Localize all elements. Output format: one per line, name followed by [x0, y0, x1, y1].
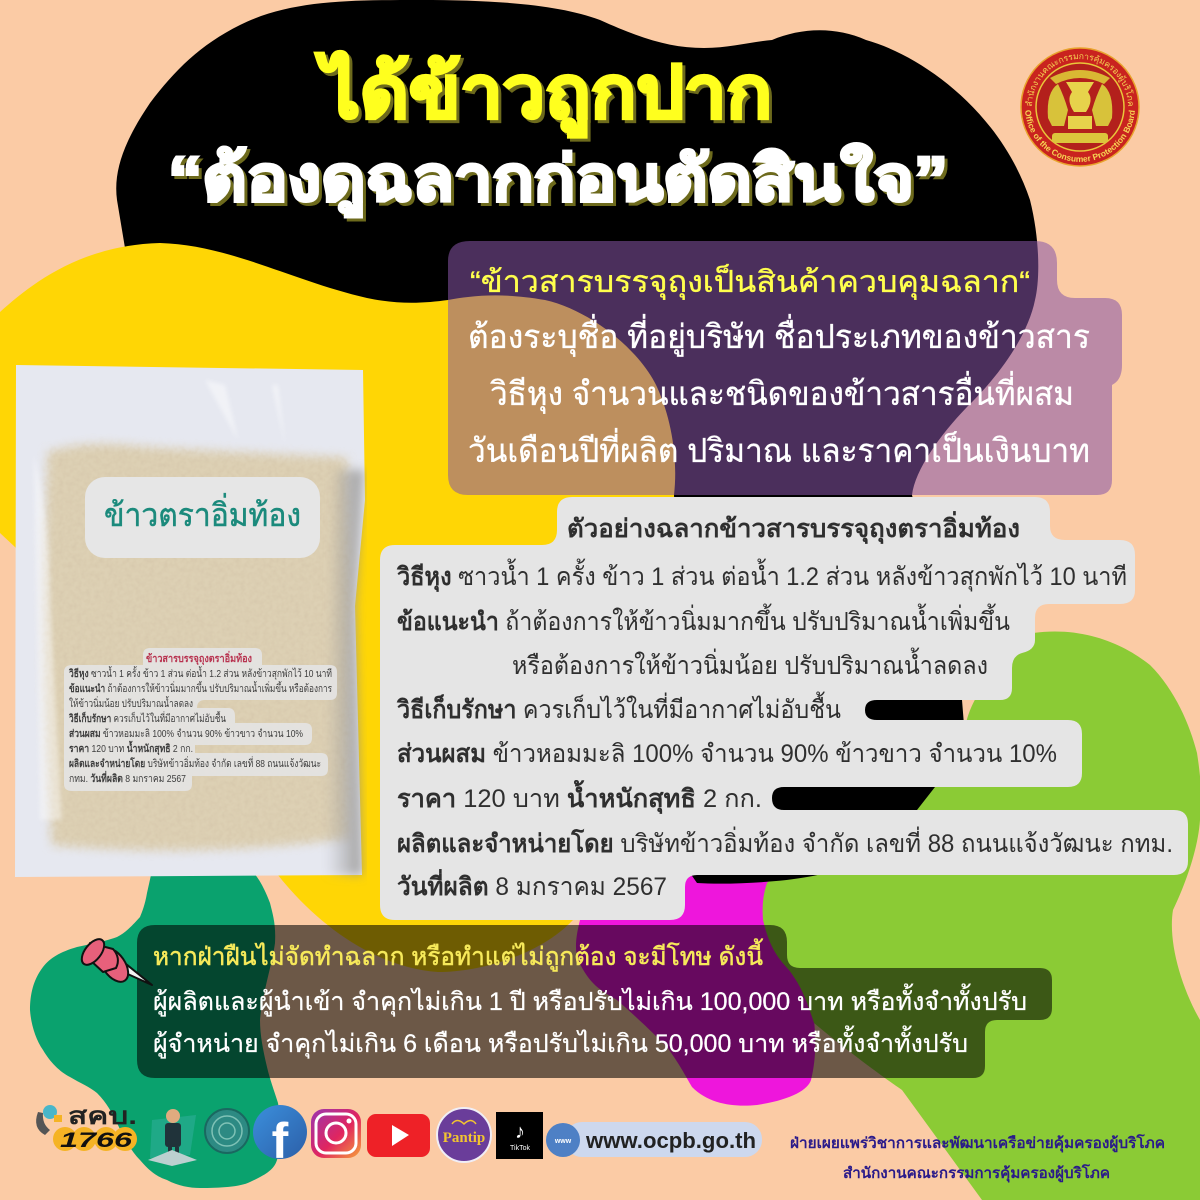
panel heading: “ข้าวสารบรรจุถุงเป็นสินค้าควบคุมฉลาก“	[470, 263, 1030, 301]
icon: TikTok: ♪	[515, 1121, 525, 1143]
mini label on bag: วิธีเก็บรักษา ควรเก็บไว้ในที่มีอากาศไม่อับชื้น	[68, 711, 226, 725]
background blob: black	[116, 0, 1038, 884]
footer icons	[36, 1103, 762, 1169]
mini label on bag	[64, 648, 337, 791]
mini label on bag: ส่วนผสม ข้าวหอมมะลิ 100% จำนวน 90% ข้าวขาว จำนวน 10%	[69, 728, 303, 740]
penalty heading: หากฝ่าฝืนไม่จัดทำฉลาก หรือทำแต่ไม่ถูกต้อง จะมีโทษ ดังนี้	[153, 938, 763, 972]
website link	[546, 1122, 762, 1157]
title line 2: “ต้องดูฉลากก่อนตัดสินใจ”	[168, 143, 948, 217]
mini label on bag: ราคา 120 บาท น้ำหนักสุทธิ 2 กก.	[69, 740, 193, 756]
price and weight: ราคา 120 บาท น้ำหนักสุทธิ 2 กก.	[397, 779, 762, 815]
mini label on bag: กทม. วันที่ผลิต 8 มกราคม 2567	[69, 770, 186, 785]
background blob: magenta	[576, 850, 850, 1106]
producer: ผลิตและจำหน่ายโดย บริษัทข้าวอิ่มท้อง จำกัด เลขที่ 88 ถนนแจ้งวัฒนะ กทม.	[397, 826, 1173, 858]
requirement text line 1: ต้องระบุชื่อ ที่อยู่บริษัท ชื่อประเภทของข้าวสาร	[468, 314, 1090, 357]
footer credit	[790, 1133, 1165, 1183]
panel: penalties	[137, 925, 1052, 1078]
product name tag: ข้าวตราอิ่มท้อง	[104, 493, 301, 533]
panel: controlled-label requirement	[448, 241, 1122, 495]
footer credit: ฝ่ายเผยแพร่วิชาการและพัฒนาเครือข่ายคุ้มครองผู้บริโภค	[790, 1133, 1165, 1153]
icon: OCPB hotline 1766: 1766	[60, 1129, 132, 1152]
icon: push pin	[77, 935, 152, 987]
icon: green round logo	[205, 1109, 249, 1153]
advice line 2: หรือต้องการให้ข้าวนิ่มน้อย ปรับปริมาณน้ำลดลง	[512, 647, 988, 680]
icon: OCPB hotline 1766	[36, 1103, 137, 1152]
penalty for sellers: ผู้จำหน่าย จำคุกไม่เกิน 6 เดือน หรือปรับไม่เกิน 50,000 บาท หรือทั้งจำทั้งปรับ	[153, 1025, 968, 1059]
example label heading: ตัวอย่างฉลากข้าวสารบรรจุถุงตราอิ่มท้อง	[567, 511, 1020, 545]
requirement text line 3: วันเดือนปีที่ผลิต ปริมาณ และราคาเป็นเงินบาท	[468, 428, 1090, 469]
icon: TikTok: TikTok	[510, 1145, 530, 1152]
icon: Facebook	[253, 1105, 307, 1169]
title line 1: ได้ข้าวถูกปาก	[315, 50, 772, 138]
requirement text line 2: วิธีหุง จำนวนและชนิดของข้าวสารอื่นที่ผสม	[490, 371, 1074, 414]
panel: example label	[380, 497, 1188, 920]
logo: Office of the Consumer Protection Board seal	[1020, 47, 1140, 167]
icon: Facebook: f	[272, 1113, 289, 1169]
website link: www.ocpb.go.th	[585, 1128, 756, 1153]
icon: Instagram	[311, 1109, 361, 1158]
advice line 1: ข้อแนะนำ ถ้าต้องการให้ข้าวนิ่มมากขึ้น ปรับปริมาณน้ำเพิ่มขึ้น	[397, 603, 1010, 636]
icon: presenter character	[148, 1109, 197, 1166]
rice bag photo	[15, 365, 365, 877]
background blob: teal green	[30, 870, 280, 1188]
mini label on bag: ให้ข้าวนิ่มน้อย ปรับปริมาณน้ำลดลง	[69, 696, 193, 710]
production date: วันที่ผลิต 8 มกราคม 2567	[397, 869, 667, 901]
mini label on bag: วิธีหุง ซาวน้ำ 1 ครั้ง ข้าว 1 ส่วน ต่อน้ำ 1.2 ส่วน หลังข้าวสุกพักไว้ 10 นาที	[68, 666, 332, 681]
mini label on bag: ผลิตและจำหน่ายโดย บริษัทข้าวอิ่มท้อง จำกัด เลขที่ 88 ถนนแจ้งวัฒนะ	[69, 756, 321, 770]
storage: วิธีเก็บรักษา ควรเก็บไว้ในที่มีอากาศไม่อับชื้น	[396, 691, 841, 724]
logo: Office of the Consumer Protection Board seal: สำนักงานคณะกรรมการคุ้มครองผู้บริโภค	[1025, 54, 1134, 106]
icon: OCPB hotline 1766: สคบ.	[68, 1103, 137, 1130]
title	[168, 50, 948, 217]
icon: Pantip	[437, 1108, 491, 1162]
penalty for producers: ผู้ผลิตและผู้นำเข้า จำคุกไม่เกิน 1 ปี หรือปรับไม่เกิน 100,000 บาท หรือทั้งจำทั้งปรับ	[153, 983, 1027, 1017]
background blob: lime green	[763, 632, 1200, 1200]
icon: Pantip: Pantip	[443, 1130, 485, 1146]
footer credit: สำนักงานคณะกรรมการคุ้มครองผู้บริโภค	[843, 1163, 1110, 1183]
website link: www	[554, 1138, 572, 1145]
mini label on bag: ข้อแนะนำ ถ้าต้องการให้ข้าวนิ่มมากขึ้น ปรับปริมาณน้ำเพิ่มขึ้น หรือต้องการ	[69, 681, 332, 695]
product name tag	[85, 477, 320, 558]
logo: Office of the Consumer Protection Board seal: Office of the Consumer Protection Board	[1025, 110, 1135, 162]
mini label on bag: ข้าวสารบรรจุถุงตราอิ่มท้อง	[146, 650, 252, 666]
ingredients: ส่วนผสม ข้าวหอมมะลิ 100% จำนวน 90% ข้าวขาว จำนวน 10%	[397, 740, 1057, 768]
cooking method: วิธีหุง ซาวน้ำ 1 ครั้ง ข้าว 1 ส่วน ต่อน้ำ 1.2 ส่วน หลังข้าวสุกพักไว้ 10 นาที	[396, 558, 1127, 593]
background blob: yellow	[0, 243, 681, 972]
icon: TikTok	[496, 1112, 543, 1159]
icon: YouTube	[367, 1114, 430, 1157]
